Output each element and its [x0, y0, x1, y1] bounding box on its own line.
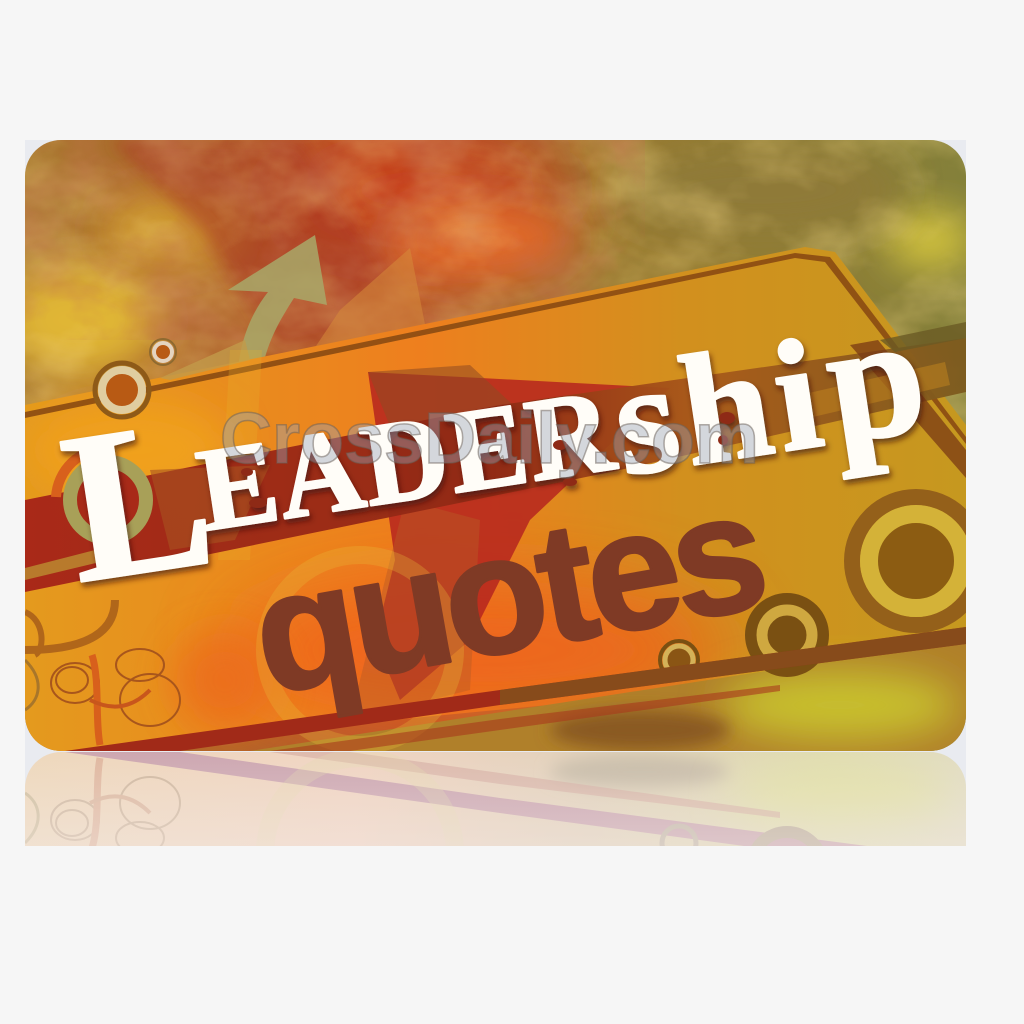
sky background [0, 130, 975, 751]
road sign panel [25, 247, 966, 751]
large ring right [852, 497, 980, 625]
heading: Leadership: hip [669, 278, 937, 500]
heading: quotes: quotes [240, 456, 774, 729]
decorative circles [56, 339, 980, 745]
heading: Leadership: EADER [189, 364, 623, 556]
diagonal maroon band [25, 322, 966, 592]
heading: Leadership: L [49, 371, 227, 628]
bottom right clouds [250, 640, 966, 751]
reflected rings [284, 752, 822, 846]
poster: leadership quotes card [25, 140, 966, 846]
reflection of card [25, 752, 966, 846]
backdrop behind card [25, 140, 966, 846]
upper left ring [95, 363, 149, 417]
watermark: CrossDaily.com: CrossDaily.com [220, 399, 759, 479]
left ring behind letter L [56, 448, 146, 538]
lower faint ring [265, 555, 455, 745]
top small ring [150, 339, 176, 365]
card artwork [0, 130, 980, 751]
central red arrow [218, 350, 670, 720]
reflected swirls [25, 758, 180, 854]
heading: Leadership: s [603, 327, 696, 510]
medium ring [751, 599, 823, 671]
heading: Leadership [49, 263, 942, 628]
reflected stripes [66, 752, 866, 846]
bottom stripes [65, 627, 966, 751]
swirl ornaments [25, 600, 180, 745]
small ring [658, 639, 700, 668]
distressed patches in letters [241, 412, 735, 508]
icon: pale green arrow [228, 235, 425, 361]
